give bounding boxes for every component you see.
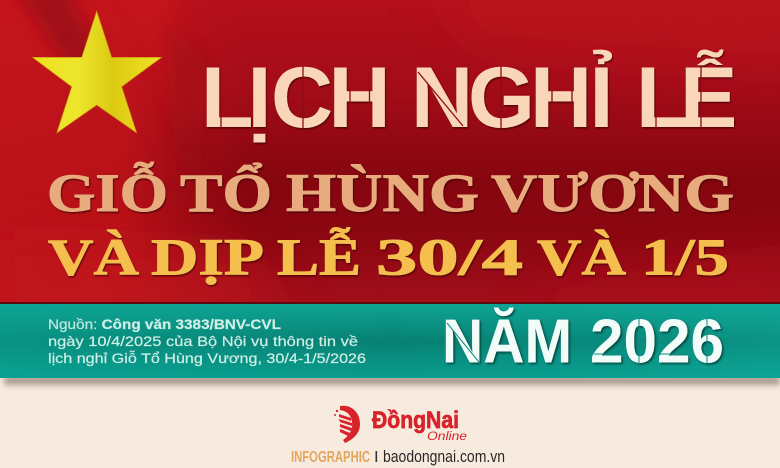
source text: ngày 10/4/2025 của Bộ Nội vụ thông tin về [48, 334, 358, 349]
title: Lịch nghỉ lễ [201, 50, 737, 146]
year: Năm 2026 [442, 308, 724, 376]
heading: Và dịp lễ 30/4 và 1/5: 1/5 [641, 230, 729, 286]
title: Lịch nghỉ lễ: NGHỈ [411, 50, 613, 146]
logo sub-word: Online [427, 429, 467, 443]
website: baodongnai.com.vn [383, 447, 505, 466]
logo wordmark: ĐồngNai [372, 407, 459, 434]
heading: Và dịp lễ 30/4 và 1/5: LỄ [277, 226, 361, 286]
icon: logo emblem [334, 406, 360, 443]
heading: Giỗ Tổ Hùng Vương: VƯƠNG [491, 163, 734, 223]
heading: Giỗ Tổ Hùng Vương: TỔ [180, 163, 272, 223]
title: Lịch nghỉ lễ: LỊCH [201, 50, 391, 146]
band shadow [4, 376, 780, 385]
logo: Đồng Nai Online [291, 406, 505, 466]
title: Lịch nghỉ lễ: LỄ [636, 50, 737, 146]
heading: Giỗ Tổ Hùng Vương: GIỖ [47, 163, 168, 223]
year: Năm 2026: NĂM [442, 308, 572, 376]
red flag background [0, 0, 780, 320]
heading: Và dịp lễ 30/4 và 1/5 [48, 226, 729, 286]
label: infographic: INFOGRAPHIC [291, 449, 370, 466]
icon: yellow star [32, 11, 162, 133]
panel: teal band [0, 302, 780, 378]
source text [48, 317, 366, 366]
year: Năm 2026: 2026 [590, 308, 724, 376]
heading: Và dịp lễ 30/4 và 1/5: DỊP [151, 230, 264, 286]
heading: Giỗ Tổ Hùng Vương [47, 163, 734, 223]
source text: lịch nghỉ Giỗ Tổ Hùng Vương, 30/4-1/5/2026 [48, 351, 366, 366]
heading: Và dịp lễ 30/4 và 1/5: VÀ [537, 228, 627, 286]
heading: Giỗ Tổ Hùng Vương: HÙNG [286, 163, 479, 223]
heading: Và dịp lễ 30/4 và 1/5: VÀ [48, 228, 140, 286]
heading: Và dịp lễ 30/4 và 1/5: 30/4 [376, 230, 523, 286]
source text: Nguồn: Công văn 3383/BNV-CVL [48, 317, 281, 332]
divider mark [376, 451, 377, 462]
